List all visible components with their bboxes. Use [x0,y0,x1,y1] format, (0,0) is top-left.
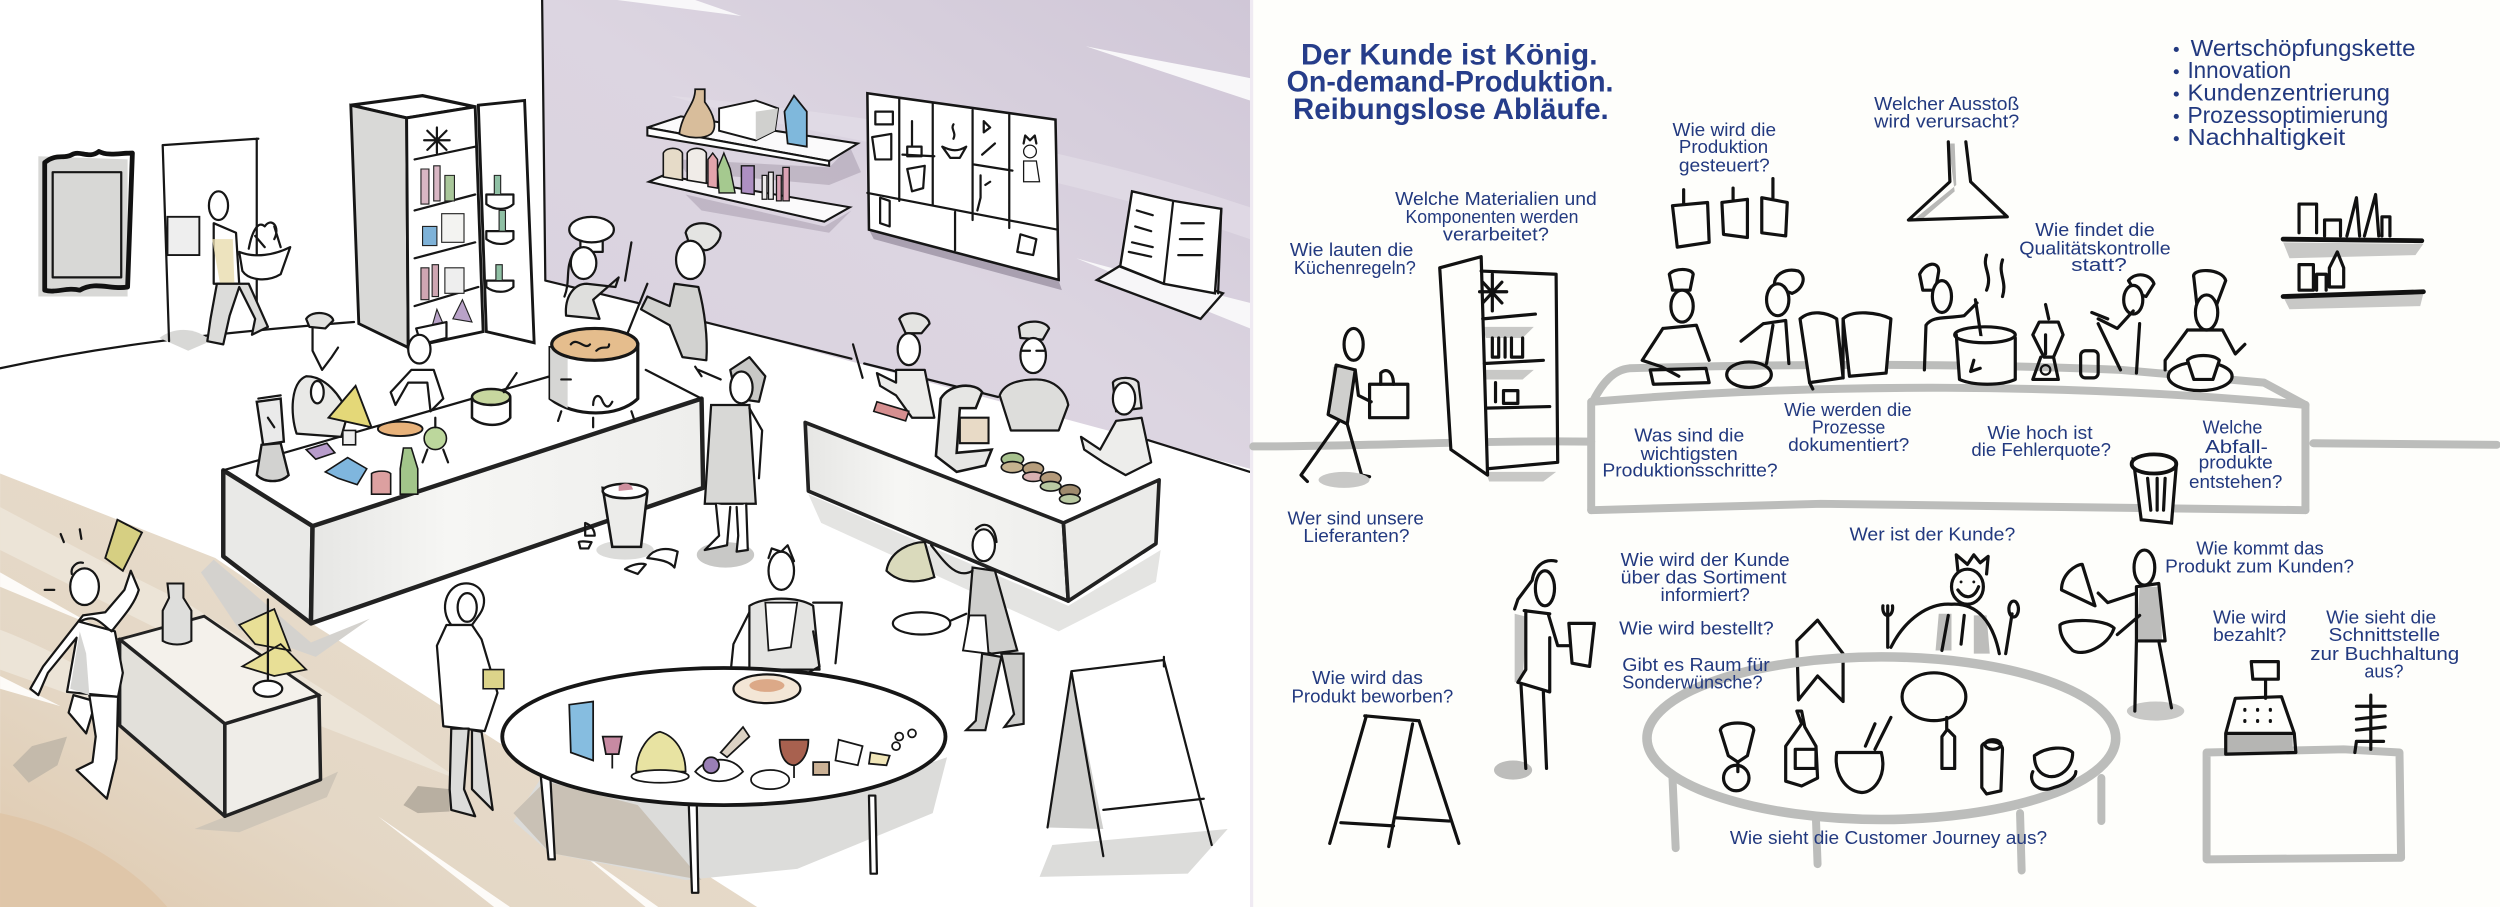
diner with bib [730,545,842,682]
fridge [351,96,534,348]
questions: Küchenregeln? [1294,257,1416,278]
mixer [936,386,992,472]
floor line right [2313,443,2497,445]
burgers [1001,453,1080,504]
chef tasting with apron [695,357,765,552]
questions: Gibt es Raum für [1622,654,1770,675]
questions: Produkt zum Kunden? [2165,555,2354,576]
icon: extractor hood [1908,142,2007,220]
questions: Wie wird das [1312,667,1423,688]
upper wall shelf [647,89,861,185]
counter: front desk [120,616,321,816]
chef with knife at pot [564,217,631,319]
panel: questions sketch [1250,0,2500,907]
icon: chef 3 stirring [1920,255,2004,370]
topic list: Nachhaltigkeit [2187,124,2346,150]
icon: recipe book [1800,313,1891,389]
plate on table [733,674,800,703]
questions: Prozesse [1812,417,1885,438]
icon: small jar [2081,351,2098,378]
questions: Produktion [1679,136,1768,157]
questions: verarbeitet? [1443,224,1549,245]
icon: wall shelves [2283,195,2423,309]
questions: Sonderwünsche? [1622,672,1763,693]
questions: Was sind die [1634,425,1744,446]
icon: A-frame sign [1330,716,1459,847]
questions: Komponenten werden [1405,206,1578,227]
wall canvas chart [867,93,1062,290]
questions: Wie wird der Kunde [1621,549,1790,570]
person running with paper [30,520,142,799]
questions: wird verursacht? [1873,111,2019,132]
questions: Wer sind unsere [1287,508,1424,529]
questions: Wie hoch ist [1987,422,2093,443]
questions: über das Sortiment [1621,567,1786,588]
round table [502,668,945,893]
small green pot [472,373,517,425]
lavender wall [542,0,1250,469]
questions: die Fehlerquote? [1971,439,2111,460]
icon: hanging notes [1672,179,1787,247]
floor line left [1253,441,1591,446]
title: On-demand-Produktion. [1287,66,1614,99]
counter: main island [223,370,703,623]
title: Reibungslose Abläufe. [1293,93,1609,126]
questions: Welcher Ausstoß [1874,93,2019,114]
chef with knife right [853,313,934,421]
topic list: Prozessoptimierung [2187,102,2388,128]
questions: Abfall- [2205,436,2268,457]
questions: wichtigsten [1640,443,1738,464]
icons: items on table [1720,673,2076,794]
questions: Wie lauten die [1290,239,1413,260]
trash can [579,483,678,574]
person with basket [207,191,290,344]
floor shadows [13,330,1228,880]
bottle on desk [163,584,191,644]
icon: trash can [2132,454,2176,523]
questions: Welche Materialien und [1395,188,1597,209]
questions: Produkt beworben? [1291,685,1453,706]
questions: Welche [2203,417,2262,438]
title: Der Kunde ist König. [1301,39,1598,72]
wall base lines [542,0,1250,472]
questions: dokumentiert? [1788,434,1909,455]
large pot [550,328,638,427]
table items [569,701,916,789]
questions: statt? [2071,254,2127,275]
icon: walking person with bag [1301,328,1408,488]
questions: Qualitätskontrolle [2019,237,2171,258]
questions: Schnittstelle [2329,624,2440,645]
questions: Wie wird bestellt? [1619,618,1774,639]
icon: blender [2033,305,2063,379]
chef with glasses [1000,322,1068,430]
questions: Produktionsschritte? [1602,460,1778,481]
icon: chef 1 with cutting board [1642,269,1709,384]
A-frame board [1048,657,1212,856]
mirror [38,151,132,297]
lower wall shelf [649,148,851,233]
icon: folded menu [1797,620,1843,701]
chef stirring pot [622,223,721,360]
chef left with plate [391,322,446,411]
questions: Wie sieht die Customer Journey aus? [1730,827,2047,848]
yellow triangle tree lamp [239,599,306,697]
icon: chef 4 tasting [2092,275,2154,373]
questions: Wer ist der Kunde? [1849,523,2015,544]
plate and ingredients [306,418,448,494]
questions: Wie werden die [1784,399,1912,420]
door [163,139,258,341]
questions [1287,93,2459,848]
icon: woman with notepad [1494,561,1594,780]
icon: chef 2 with plate [1727,270,1803,387]
wood floor [0,474,757,907]
questions: Wie sieht die [2326,606,2436,627]
lower right counter [2207,749,2401,859]
questions: informiert? [1661,584,1750,605]
questions: bezahlt? [2213,624,2286,645]
icon: cash register [2226,662,2296,754]
woman with notepad [437,583,504,816]
floor edge line [0,322,354,368]
icon: cooking pot [1955,327,2015,384]
questions: Wie kommt das [2196,537,2324,558]
waiter with cloche [886,525,1024,730]
questions: Wie wird die [1672,119,1776,140]
blender [257,395,289,481]
icon: open fridge [1440,257,1558,481]
questions: Lieferanten? [1303,525,1409,546]
icon: receipt spike [2355,695,2385,753]
table outline [1647,657,2116,870]
icon: waiter with cloche and bowl [2060,550,2184,721]
questions: aus? [2364,661,2403,682]
questions: Wie findet die [2035,219,2155,240]
questions: entstehen? [2189,471,2282,492]
female cook [1081,378,1151,475]
panel: illustrated kitchen scene [0,0,1250,907]
topic list [2174,35,2415,150]
questions: produkte [2199,452,2273,473]
questions: zur Buchhaltung [2310,643,2459,664]
questions: gesteuert? [1679,155,1770,176]
icon: king at table [1883,555,2018,654]
chef left with triangle [293,313,372,437]
questions: Wie wird [2213,606,2286,627]
topic list: Innovation [2187,57,2291,83]
kitchen counter outline [1591,365,2305,510]
menu book stand [1097,191,1223,319]
title [1287,39,1614,126]
topic list: Wertschöpfungskette [2191,35,2415,61]
icon: chef 5 with bowl [2165,271,2245,391]
counter: right island [805,391,1159,601]
topic list: Kundenzentrierung [2187,79,2390,105]
